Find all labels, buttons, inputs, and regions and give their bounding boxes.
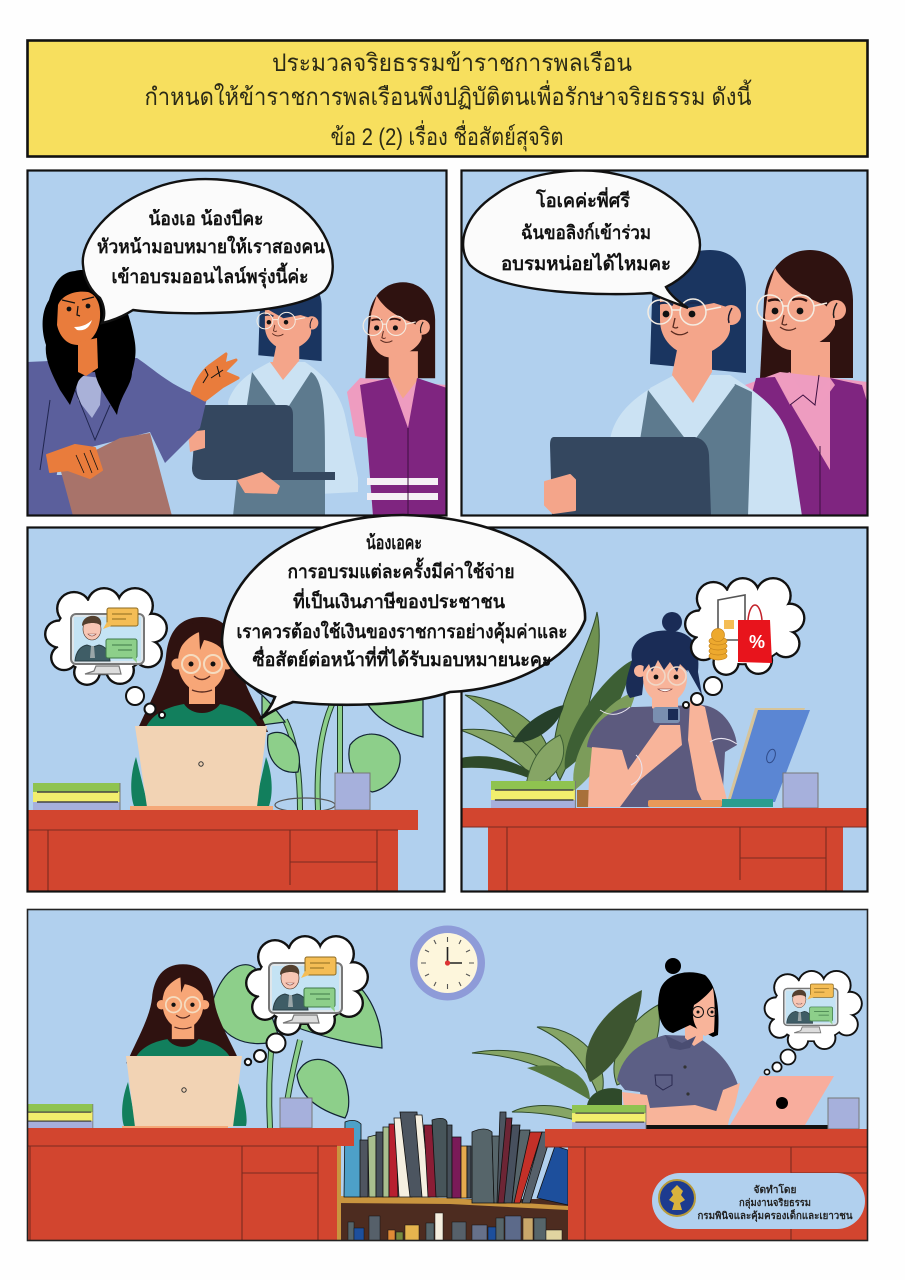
- pot: [280, 1098, 312, 1128]
- title banner: [28, 40, 868, 156]
- speech bubble: advice about taxpayer money: การอบรมแต่ละครั้งมีค่าใช้จ่าย: [288, 557, 514, 583]
- woman with bun typing: [617, 958, 740, 1125]
- speech bubble: reply: อบรมหน่อยได้ไหมคะ: [501, 252, 671, 275]
- speech bubble: reply: [463, 171, 700, 308]
- speech bubble: supervisor: น้องเอ น้องบีคะ: [148, 208, 264, 230]
- woman on right in purple vest: [347, 282, 447, 516]
- badge text: กลุ่มงานจริยธรรม: [739, 1197, 811, 1209]
- woman with phone: [587, 612, 737, 807]
- left monstera plant: [213, 965, 382, 1128]
- speech bubble: reply: โอเคค่ะพี่ศรี: [535, 187, 631, 212]
- speech bubble: advice about taxpayer money: น้องเอคะ: [366, 532, 422, 554]
- thought bubble: online shopping: %: [749, 632, 765, 652]
- book stack: [491, 781, 575, 808]
- title line 3: ข้อ 2 (2) เรื่อง ชื่อสัตย์สุจริต: [330, 120, 564, 152]
- laptop: [130, 726, 273, 811]
- woman with long hair: [122, 964, 247, 1126]
- speech bubble: supervisor: เข้าอบรมออนไลน์พรุ่งนี้ค่ะ: [112, 262, 308, 289]
- thought bubble: online meeting: [44, 587, 168, 718]
- desk: [461, 808, 868, 892]
- logo: [659, 1180, 695, 1216]
- woman with long hair: [131, 617, 272, 806]
- speech bubble: reply: ฉันขอลิงก์เข้าร่วม: [521, 222, 651, 244]
- pot: [783, 773, 818, 808]
- laptop: [122, 1056, 242, 1129]
- pot: [828, 1098, 859, 1129]
- book stack: [572, 1105, 646, 1129]
- woman in grey vest holding laptop: [188, 280, 358, 516]
- thought bubble: left meeting: [245, 935, 369, 1065]
- wall clock: [410, 926, 485, 1000]
- right desk: [545, 1129, 868, 1241]
- panel 3: woman at laptop listening: [27, 527, 445, 892]
- woman in grey vest close-up with laptop: [545, 250, 802, 516]
- speech bubble: advice about taxpayer money: [222, 515, 585, 719]
- right leafy plant: [472, 990, 659, 1125]
- thought bubble: online shopping: [683, 577, 805, 708]
- blue laptop: [648, 708, 810, 807]
- panel 4: woman on phone shopping: [460, 527, 868, 892]
- speech bubble: advice about taxpayer money: ซื่อสัตย์ต่อหน้าที่ที่ได้รับมอบหมายนะคะ: [252, 646, 552, 671]
- desk: [27, 810, 418, 892]
- book stack: [25, 1104, 93, 1128]
- organization badge: [652, 1173, 865, 1229]
- speech bubble: advice about taxpayer money: เราควรต้องใช้เงินของราชการอย่างคุ้มค่าและ: [236, 620, 568, 644]
- thought bubble: right meeting: [764, 970, 863, 1075]
- left desk: [27, 1128, 354, 1241]
- speech bubble: advice about taxpayer money: ที่เป็นเงินภาษีของประชาชน: [293, 588, 505, 613]
- plant behind desk: [252, 688, 424, 810]
- title line 2: กำหนดให้ข้าราชการพลเรือนพึงปฏิบัติตนเพื่อรักษาจริยธรรม ดังนี้: [144, 79, 752, 111]
- panel 2: staff reply: [461, 170, 868, 516]
- bookshelf: [337, 1112, 570, 1241]
- speaking woman in blue suit: [27, 270, 238, 516]
- leafy plant: [460, 612, 636, 807]
- pink laptop: [646, 1076, 834, 1129]
- book stack: [33, 783, 120, 810]
- pot: [335, 773, 370, 810]
- badge text: กรมพินิจและคุ้มครองเด็กและเยาวชน: [698, 1208, 853, 1222]
- title line 1: ประมวลจริยธรรมข้าราชการพลเรือน: [272, 50, 632, 77]
- panel 5: both staff in the office: [25, 909, 868, 1241]
- woman in purple vest close-up: [745, 250, 868, 516]
- speech bubble: supervisor: หัวหน้ามอบหมายให้เราสองคน: [97, 235, 325, 258]
- panel 1: supervisor assigns training: [27, 170, 447, 516]
- speech bubble: supervisor: [83, 179, 333, 323]
- badge text: [698, 1183, 853, 1222]
- badge text: จัดทำโดย: [754, 1183, 797, 1196]
